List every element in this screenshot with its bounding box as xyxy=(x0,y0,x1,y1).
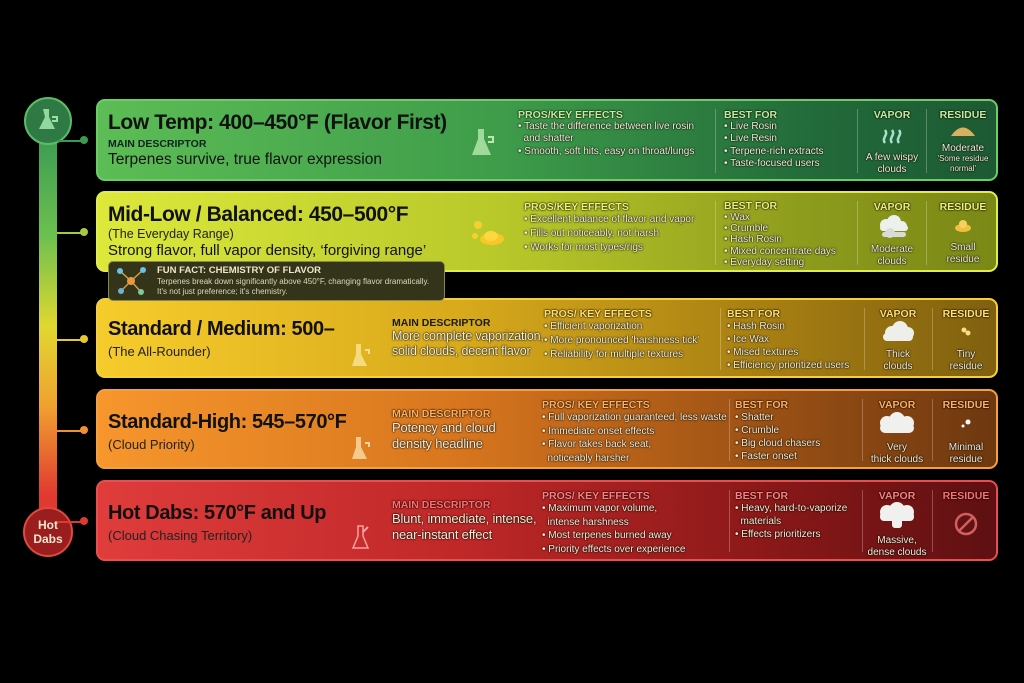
main descriptor: near-instant effect xyxy=(392,527,492,542)
pros xyxy=(541,399,728,464)
bottom bulb: Hot Dabs xyxy=(23,507,73,557)
main descriptor xyxy=(391,317,544,358)
pros: • Priority effects over experience xyxy=(542,544,685,554)
main descriptor: solid clouds, decent flavor xyxy=(392,344,530,358)
best for: • Wax xyxy=(724,212,750,223)
vapor: Very xyxy=(887,442,907,453)
pros xyxy=(541,490,686,556)
pros: • More pronounced 'harshness tick' xyxy=(544,335,699,346)
main descriptor: MAIN DESCRIPTOR xyxy=(108,138,206,150)
best for: • Crumble xyxy=(724,223,768,234)
icon: beaker xyxy=(472,129,494,155)
best for: • Everyday setting xyxy=(724,257,804,268)
best for xyxy=(726,308,850,372)
best for: • Hash Rosin xyxy=(724,234,782,245)
callout: fun fact: Terpenes break down significantly above 450°F, changing flavor dramatically. xyxy=(157,277,429,286)
main descriptor xyxy=(108,138,382,168)
residue: RESIDUE xyxy=(943,308,989,320)
best for: materials xyxy=(741,516,781,527)
subtitle: (The All-Rounder) xyxy=(108,344,211,359)
best for xyxy=(723,109,824,169)
pros: and shatter xyxy=(524,133,574,144)
pros: • Full vaporization guaranteed, less waste xyxy=(542,412,727,423)
vapor: VAPOR xyxy=(874,201,910,213)
best for: BEST FOR xyxy=(724,200,777,212)
best for xyxy=(723,200,837,268)
residue xyxy=(937,109,989,173)
best for: BEST FOR xyxy=(735,490,788,502)
residue: Tiny xyxy=(957,349,975,360)
main descriptor: Blunt, immediate, intense, xyxy=(392,511,536,526)
best for: • Terpene-rich extracts xyxy=(724,146,823,157)
residue: Moderate xyxy=(942,143,984,154)
title: Standard-High: 545–570°F xyxy=(108,411,346,433)
residue: 'Some residue xyxy=(938,154,988,163)
main descriptor: Potency and cloud xyxy=(392,420,496,435)
pros: • Reliability for multiple textures xyxy=(544,349,683,360)
panel: mid-low xyxy=(96,191,998,272)
subtitle: (Cloud Chasing Territory) xyxy=(108,528,252,543)
pros: • Fills out noticeably, not harsh xyxy=(524,228,659,239)
pros: intense harshness xyxy=(548,516,629,528)
pros xyxy=(523,201,696,254)
pros: PROS/ KEY EFFECTS xyxy=(544,308,652,320)
icon: bong xyxy=(352,437,370,459)
vapor: thick clouds xyxy=(871,454,923,464)
subtitle and descriptor xyxy=(108,227,426,259)
vapor: VAPOR xyxy=(880,308,916,320)
pros: • Efficient vaporization xyxy=(544,321,642,332)
best for: • Shatter xyxy=(735,412,774,423)
bottom bulb: Hot Dabs: Hot xyxy=(38,518,58,532)
vapor xyxy=(865,109,919,175)
pros xyxy=(517,109,696,158)
pros: PROS/ KEY EFFECTS xyxy=(542,490,650,502)
residue: residue xyxy=(950,454,982,464)
title: Hot Dabs: 570°F and Up xyxy=(108,502,326,524)
residue: RESIDUE xyxy=(943,399,989,411)
callout: fun fact: FUN FACT: CHEMISTRY OF FLAVOR xyxy=(157,265,321,276)
thermometer bar xyxy=(39,135,57,535)
main descriptor: More complete vaporization, xyxy=(392,329,544,343)
vapor: clouds xyxy=(884,361,912,372)
main descriptor: MAIN DESCRIPTOR xyxy=(392,408,490,420)
main descriptor xyxy=(391,499,537,542)
vapor: A few wispy xyxy=(866,152,918,163)
pros xyxy=(543,308,700,360)
subtitle and descriptor: Strong flavor, full vapor density, ‘forgiving range’ xyxy=(108,242,426,259)
best for: • Effects prioritizers xyxy=(735,529,821,540)
best for: • Ice Wax xyxy=(727,334,769,345)
subtitle and descriptor: (The Everyday Range) xyxy=(108,227,234,241)
residue xyxy=(942,399,990,464)
icon: bong xyxy=(352,344,370,366)
best for: • Big cloud chasers xyxy=(735,438,820,449)
vapor: dense clouds xyxy=(868,546,926,558)
residue xyxy=(942,308,990,372)
pros: • Taste the difference between live rosin xyxy=(518,121,694,132)
vapor: VAPOR xyxy=(879,399,915,411)
main descriptor: Terpenes survive, true flavor expression xyxy=(108,151,382,168)
vapor: Thick xyxy=(886,349,910,360)
best for: • Heavy, hard-to-vaporize xyxy=(735,503,847,514)
best for: • Live Resin xyxy=(724,133,777,144)
vapor: clouds xyxy=(878,164,906,175)
main descriptor: MAIN DESCRIPTOR xyxy=(392,499,490,511)
residue xyxy=(942,490,990,536)
best for: BEST FOR xyxy=(727,308,780,320)
panel: standard high xyxy=(96,389,998,469)
residue: residue xyxy=(947,254,979,265)
subtitle: (Cloud Priority) xyxy=(108,437,195,452)
pros: noticeably harsher xyxy=(548,452,629,464)
panel: hot dabs xyxy=(96,480,998,561)
best for: BEST FOR xyxy=(735,399,788,411)
best for: BEST FOR xyxy=(724,109,777,121)
residue: normal' xyxy=(950,164,976,173)
callout: fun fact: It's not just preference; it's chemistry. xyxy=(157,287,288,296)
pros: • Flavor takes back seat, xyxy=(542,439,651,450)
residue: RESIDUE xyxy=(943,490,989,502)
vapor xyxy=(878,308,917,372)
pros: • Immediate onset effects xyxy=(542,426,654,436)
icon: molecule xyxy=(117,267,146,295)
pros: PROS/KEY EFFECTS xyxy=(518,109,623,121)
best for: • Hash Rosin xyxy=(727,321,785,332)
top bulb icon xyxy=(24,97,72,145)
pros: PROS/ KEY EFFECTS xyxy=(542,399,650,411)
residue xyxy=(938,201,987,265)
residue: residue xyxy=(950,361,982,372)
best for: • Efficiency prioritized users xyxy=(727,360,849,371)
pros: • Works for most types/rigs xyxy=(524,242,643,253)
best for: • Crumble xyxy=(735,425,779,436)
vapor xyxy=(870,399,924,464)
best for: • Mixed concentrate days xyxy=(724,246,836,257)
best for: • Mised textures xyxy=(727,347,798,358)
vapor: clouds xyxy=(878,256,906,267)
main descriptor xyxy=(390,408,497,452)
best for: • Taste-focused users xyxy=(724,158,820,169)
title: Standard / Medium: 500– xyxy=(108,318,334,340)
main descriptor: MAIN DESCRIPTOR xyxy=(392,317,490,329)
pros: PROS/KEY EFFECTS xyxy=(524,201,629,213)
thermometer xyxy=(23,97,88,557)
title: Low Temp: 400–450°F (Flavor First) xyxy=(108,111,447,134)
best for xyxy=(734,399,822,462)
residue: Minimal xyxy=(949,442,983,453)
vapor: Massive, xyxy=(877,535,917,546)
residue: Small xyxy=(950,242,976,253)
bottom bulb: Hot Dabs: Dabs xyxy=(33,532,63,546)
main descriptor: density headline xyxy=(392,436,483,451)
pros: • Smooth, soft hits, easy on throat/lungs xyxy=(518,146,694,157)
vapor: Moderate xyxy=(871,244,913,255)
best for: • Faster onset xyxy=(735,451,797,462)
vapor xyxy=(870,201,914,267)
icon: wax xyxy=(472,221,504,245)
vapor xyxy=(866,490,928,558)
title: Mid-Low / Balanced: 450–500°F xyxy=(108,203,408,226)
pros: • Excellent balance of flavor and vapor xyxy=(524,214,694,225)
pros: • Maximum vapor volume, xyxy=(542,503,657,514)
vapor: VAPOR xyxy=(874,109,910,121)
best for: • Live Rosin xyxy=(724,121,777,132)
best for xyxy=(734,490,848,540)
panel: low temp xyxy=(96,99,998,181)
callout: fun fact xyxy=(108,261,445,301)
vapor: VAPOR xyxy=(879,490,915,502)
residue: RESIDUE xyxy=(940,201,986,213)
pros: • Most terpenes burned away xyxy=(542,530,672,541)
residue: RESIDUE xyxy=(940,109,986,121)
icon: bong xyxy=(352,525,369,549)
panel: standard medium xyxy=(96,298,998,378)
